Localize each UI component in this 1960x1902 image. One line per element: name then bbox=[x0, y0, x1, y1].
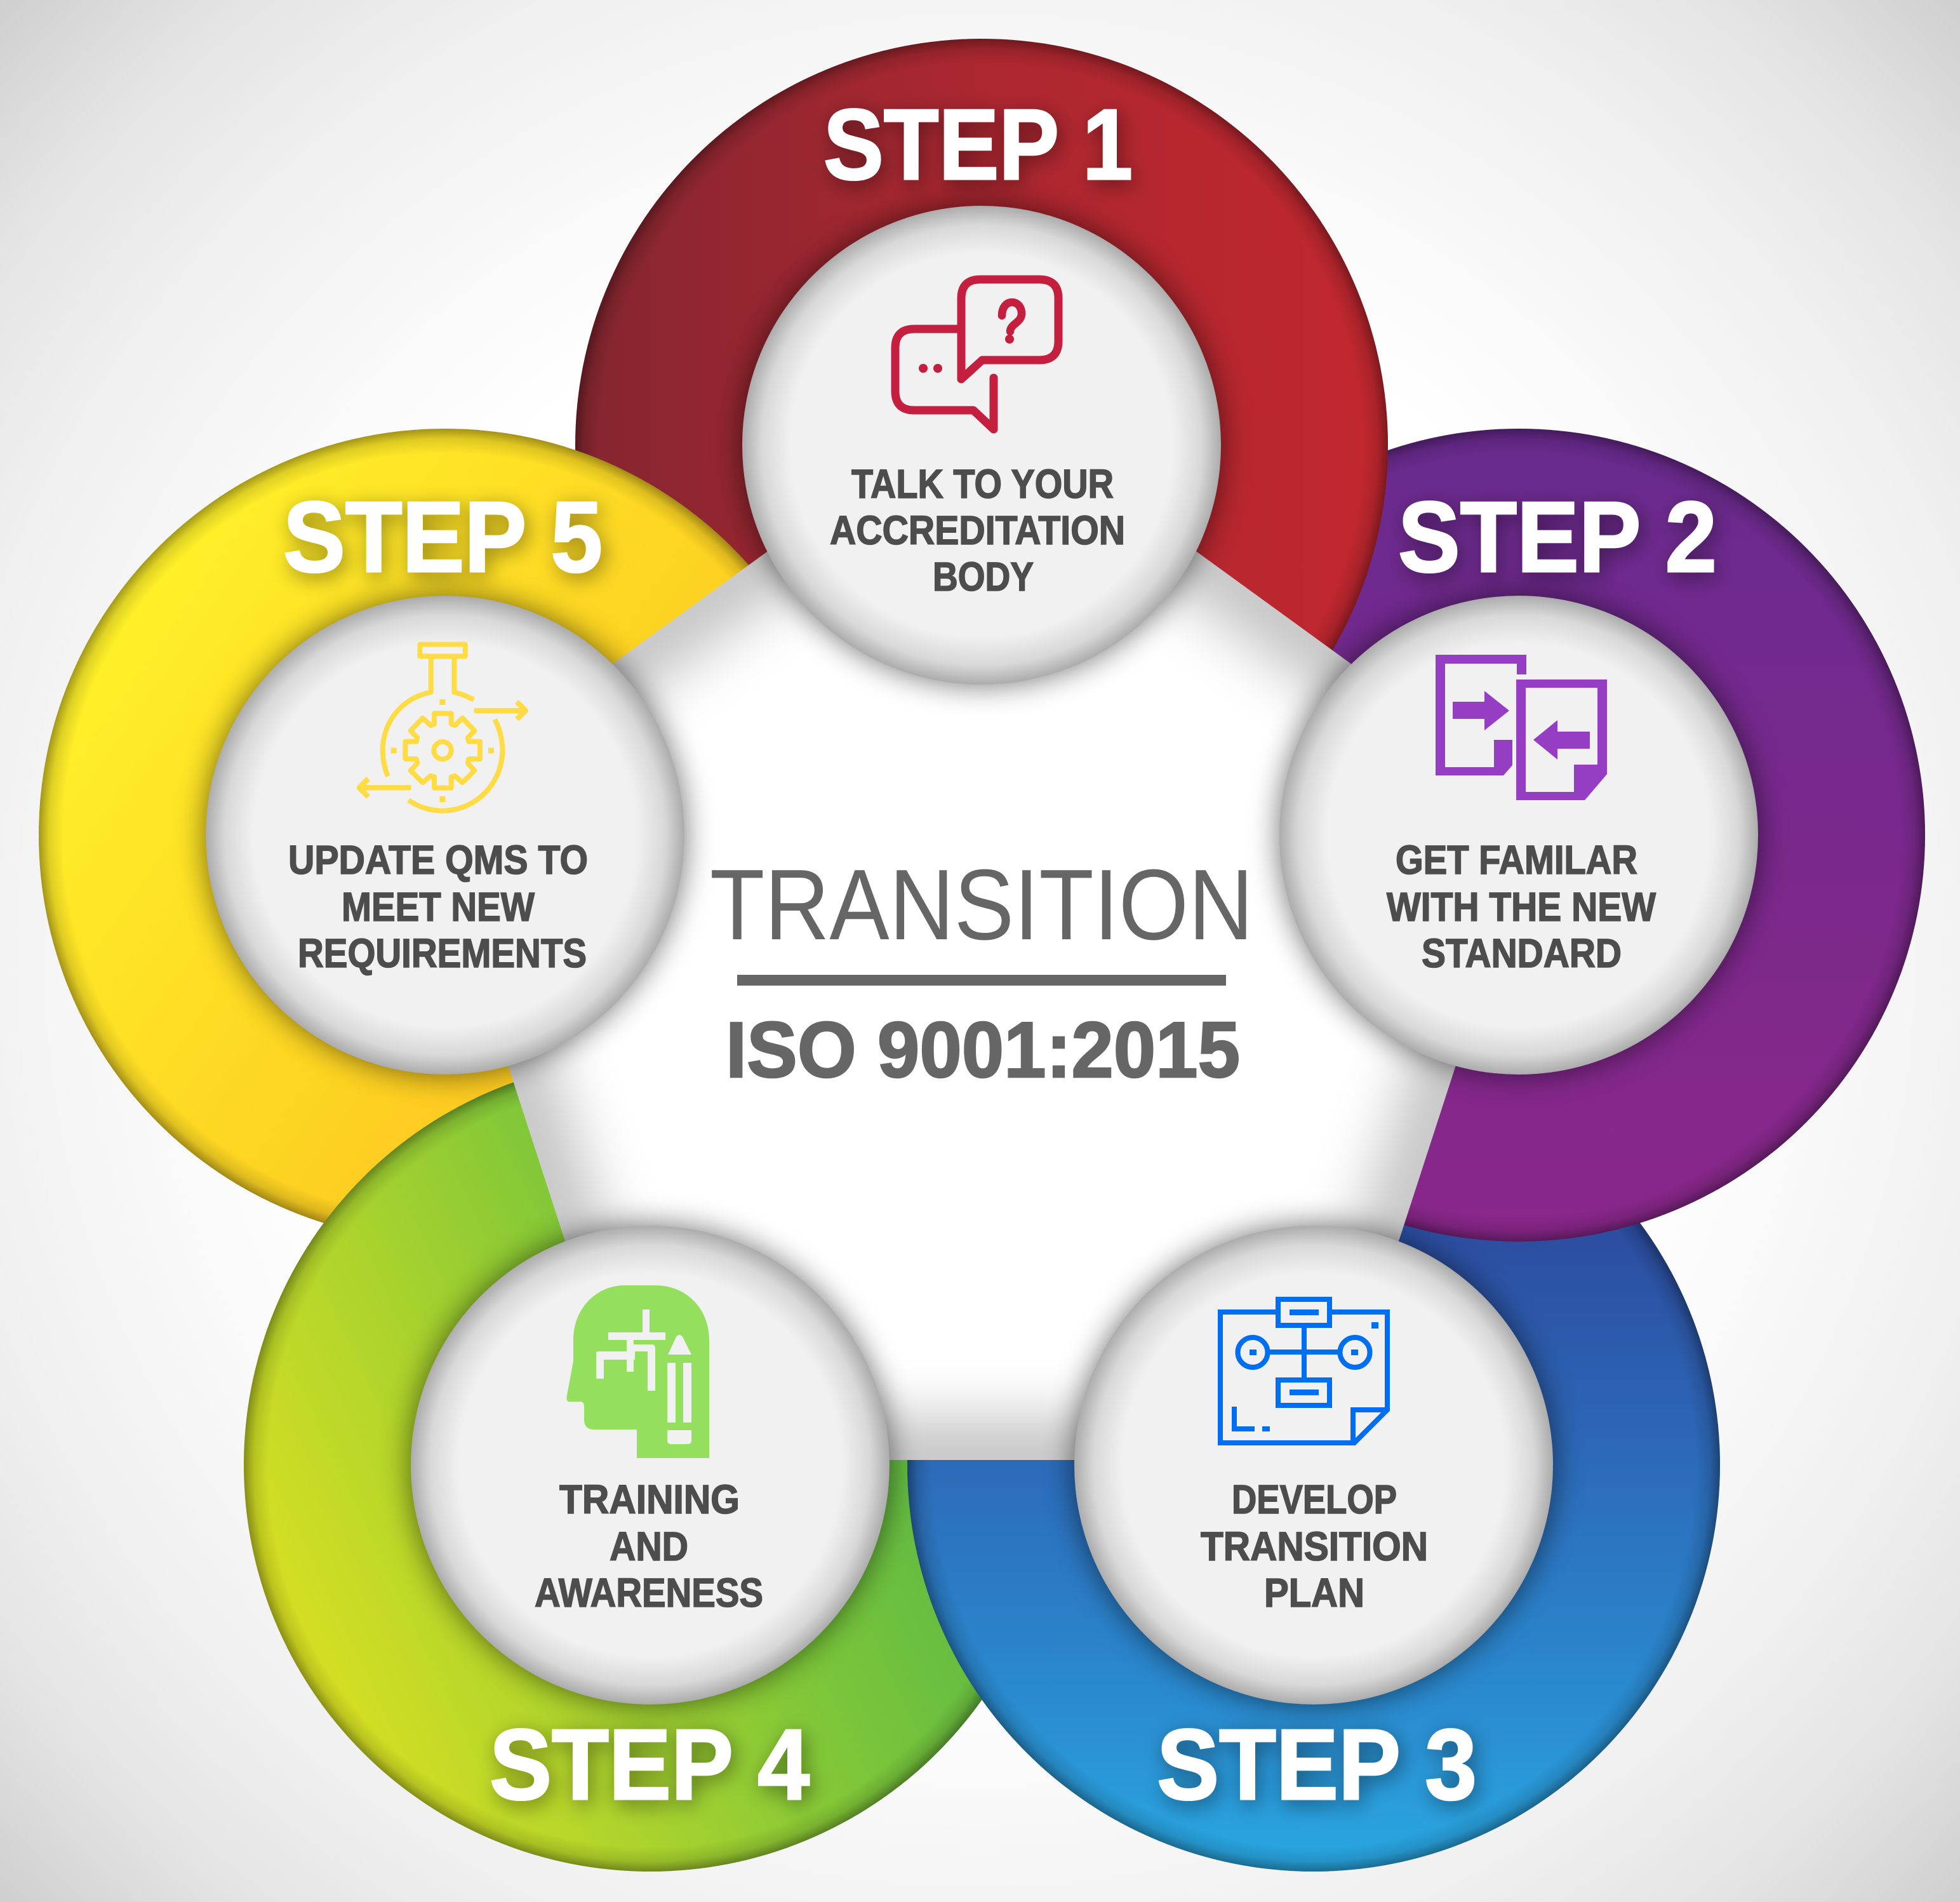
text: step 2 description: STANDARD bbox=[1422, 930, 1622, 976]
ring: step 4 green bbox=[244, 1059, 1057, 1872]
heading: step 1: STEP 1 bbox=[823, 89, 1133, 201]
text: step 3 description: TRANSITION bbox=[1201, 1524, 1428, 1569]
text: step 1 description: ACCREDITATION bbox=[830, 507, 1125, 553]
ring: step 3 blue bbox=[907, 1059, 1720, 1872]
panel: step 4 disk bbox=[411, 1226, 890, 1704]
icon: plan flowchart bbox=[1220, 1299, 1387, 1443]
ring: step 2 purple bbox=[1112, 429, 1925, 1242]
title underline bbox=[737, 975, 1226, 986]
heading: step 3: STEP 3 bbox=[1157, 1709, 1477, 1821]
text: step 2 description: GET FAMILAR bbox=[1396, 837, 1637, 883]
ring: step 5 yellow bbox=[39, 429, 851, 1242]
heading: step 4: STEP 4 bbox=[490, 1709, 810, 1821]
panel: step 5 disk bbox=[206, 596, 684, 1075]
icon: question chat bubbles bbox=[895, 279, 1058, 429]
ring: green overlap above yellow bbox=[265, 1082, 560, 1334]
heading: step 5: STEP 5 bbox=[283, 481, 603, 593]
text: step 4 description: AWARENESS bbox=[535, 1570, 763, 1616]
text: step 4 description bbox=[535, 1477, 763, 1616]
text: step 3 description: PLAN bbox=[1264, 1570, 1364, 1616]
text: step 5 description bbox=[288, 837, 588, 976]
panel: step 1 disk bbox=[742, 206, 1221, 685]
text: step 2 description bbox=[1387, 837, 1657, 976]
text: step 2 description: WITH THE NEW bbox=[1387, 884, 1657, 930]
text: step 4 description: TRAINING bbox=[559, 1477, 740, 1522]
icon: head with pencil bbox=[566, 1285, 709, 1458]
subheading: standard: ISO 9001:2015 bbox=[726, 1007, 1240, 1094]
text: step 3 description bbox=[1201, 1477, 1428, 1616]
icon: flask with gear bbox=[359, 645, 526, 811]
text: step 1 description: BODY bbox=[933, 554, 1034, 599]
panel: step 2 disk bbox=[1279, 596, 1758, 1075]
panel: step 3 disk bbox=[1074, 1226, 1553, 1704]
ring: step 1 red bbox=[575, 39, 1388, 852]
heading: step 2: STEP 2 bbox=[1398, 481, 1717, 593]
text: step 3 description: DEVELOP bbox=[1232, 1477, 1397, 1522]
centre pentagon bbox=[508, 551, 1456, 1460]
centre title bbox=[710, 849, 1253, 1094]
icon: exchanged documents bbox=[1436, 655, 1607, 800]
text: step 5 description: REQUIREMENTS bbox=[298, 930, 587, 976]
text: step 4 description: AND bbox=[610, 1524, 688, 1569]
heading: transition: TRANSITION bbox=[710, 849, 1253, 961]
text: step 5 description: UPDATE QMS TO bbox=[288, 837, 588, 883]
text: step 1 description: TALK TO YOUR bbox=[851, 461, 1114, 507]
text: step 5 description: MEET NEW bbox=[342, 884, 535, 930]
text: step 1 description bbox=[830, 461, 1125, 599]
